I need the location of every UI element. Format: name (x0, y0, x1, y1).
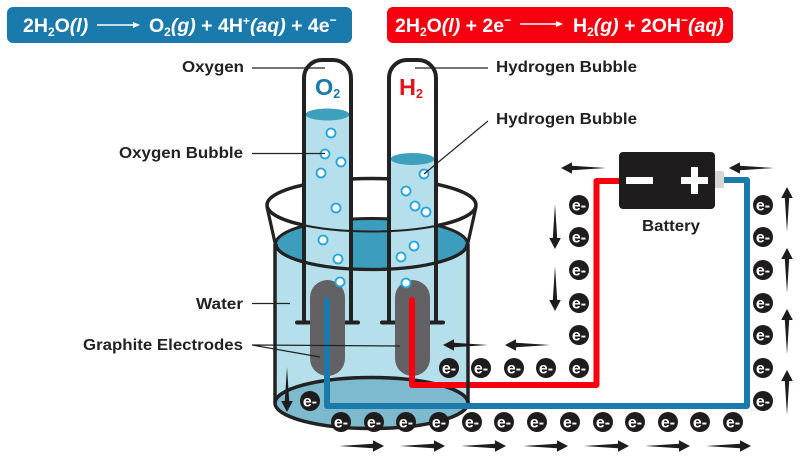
electrons: bottom row: e- (334, 414, 348, 432)
cathode equation banner: 2H (395, 15, 420, 37)
electrons: bottom row: e- (399, 414, 413, 432)
cathode equation banner (387, 7, 733, 43)
label: Water (196, 296, 290, 313)
electron in beaker: e- (303, 394, 317, 410)
electrons: bottom row: e- (563, 414, 577, 432)
anode equation banner: 2 (164, 25, 171, 39)
cathode equation banner: − (504, 13, 511, 27)
anode equation banner: O (55, 15, 70, 37)
electrons: right column: e- (756, 296, 770, 312)
electrons: right column: e- (756, 394, 770, 410)
electrons: bottom row: e- (693, 414, 707, 432)
beaker front edges (267, 205, 476, 270)
gas formula: O2: 2 (333, 87, 340, 101)
label: Battery: Battery (642, 218, 700, 235)
anode equation banner: 2H (23, 15, 48, 37)
electrons: red wire column and row: e- (474, 360, 488, 378)
label: Oxygen Bubble: Oxygen Bubble (119, 145, 243, 162)
electrons: bottom row: e- (726, 414, 740, 432)
electrons: right column: e- (756, 328, 770, 344)
blue wire (327, 180, 747, 406)
electrons: right column: e- (756, 198, 770, 214)
arrows: left column pointing down (549, 204, 561, 311)
cathode equation banner: 2 (420, 25, 427, 39)
cathode equation banner: + 2OH (624, 15, 681, 37)
gas formula: H2: H (399, 74, 416, 100)
cathode equation banner: (l) + 2e (442, 15, 504, 37)
electrons: red wire column and row: e- (507, 360, 521, 378)
hydrogen bubbles (396, 170, 430, 288)
electrons: right column: e- (756, 230, 770, 246)
electrons: red wire column and row: e- (572, 198, 586, 214)
test tube: oxygen (297, 60, 358, 322)
anode equation banner: + 4e (291, 15, 330, 37)
red wire (412, 181, 620, 385)
cathode equation banner: (aq) (688, 15, 724, 37)
electrons: bottom row: e- (432, 414, 446, 432)
cathode equation banner: H (573, 15, 587, 37)
electrons: red wire column and row: e- (572, 328, 586, 344)
label: Hydrogen Bubble (bubble) (424, 111, 637, 174)
cathode equation banner: − (681, 13, 688, 27)
electrons: bottom row: e- (530, 414, 544, 432)
anode equation banner: O (149, 15, 164, 37)
gas formula: O2: O (315, 74, 333, 100)
electrons: right column (753, 195, 773, 411)
anode equation banner: + 4H (201, 15, 243, 37)
anode equation banner (7, 7, 352, 43)
electrons: bottom row: e- (465, 414, 479, 432)
beaker side walls (275, 244, 468, 403)
anode equation banner: (g) (171, 15, 196, 37)
anode equation banner: − (330, 13, 337, 27)
anode equation banner: 2 (48, 25, 55, 39)
label: Graphite Electrodes (83, 337, 400, 357)
anode equation banner: (aq) (250, 15, 286, 37)
anode equation banner: (l) (70, 15, 88, 37)
cathode equation banner: 2 (587, 25, 594, 39)
label: Hydrogen Bubble (gas): Hydrogen Bubble (496, 59, 637, 76)
arrows: bottom row pointing right (339, 440, 751, 452)
electrons: red wire column and row: e- (539, 360, 553, 378)
electrons: red wire column and row (439, 195, 589, 378)
electrons: bottom row: e- (367, 414, 381, 432)
arrows: right column pointing up (781, 187, 793, 415)
arrow in beaker pointing down (281, 367, 293, 412)
electrons: red wire column and row: e- (572, 360, 586, 378)
label: Oxygen: Oxygen (182, 59, 244, 76)
label: Graphite Electrodes: Graphite Electrodes (83, 337, 243, 354)
battery (619, 152, 724, 209)
beaker rim back (267, 178, 476, 232)
gas formula: H2: 2 (416, 87, 423, 101)
electrons: right column: e- (756, 360, 770, 378)
cathode equation banner: (g) (594, 15, 619, 37)
electrons: bottom row: e- (661, 414, 675, 432)
electrons: red wire column and row: e- (442, 360, 456, 378)
graphite electrodes (310, 280, 430, 376)
label: Hydrogen Bubble (bubble): Hydrogen Bubble (496, 111, 637, 128)
electrons: bottom row: e- (497, 414, 511, 432)
electrons: bottom row: e- (628, 414, 642, 432)
electrons: red wire column and row: e- (572, 296, 586, 312)
electrons: red wire column and row: e- (572, 230, 586, 246)
test tube: hydrogen (382, 60, 443, 322)
electrons: bottom row: e- (596, 414, 610, 432)
electrons: bottom row (331, 412, 743, 432)
oxygen bubbles (316, 128, 346, 286)
arrows: pointing left beside battery and above row (443, 162, 774, 351)
beaker with water (275, 218, 468, 428)
cathode equation banner: O (427, 15, 442, 37)
anode equation banner: + (243, 14, 250, 28)
label: Water: Water (196, 296, 243, 313)
electrons: right column: e- (756, 262, 770, 280)
electron in beaker (300, 391, 320, 411)
electrons: red wire column and row: e- (572, 262, 586, 280)
